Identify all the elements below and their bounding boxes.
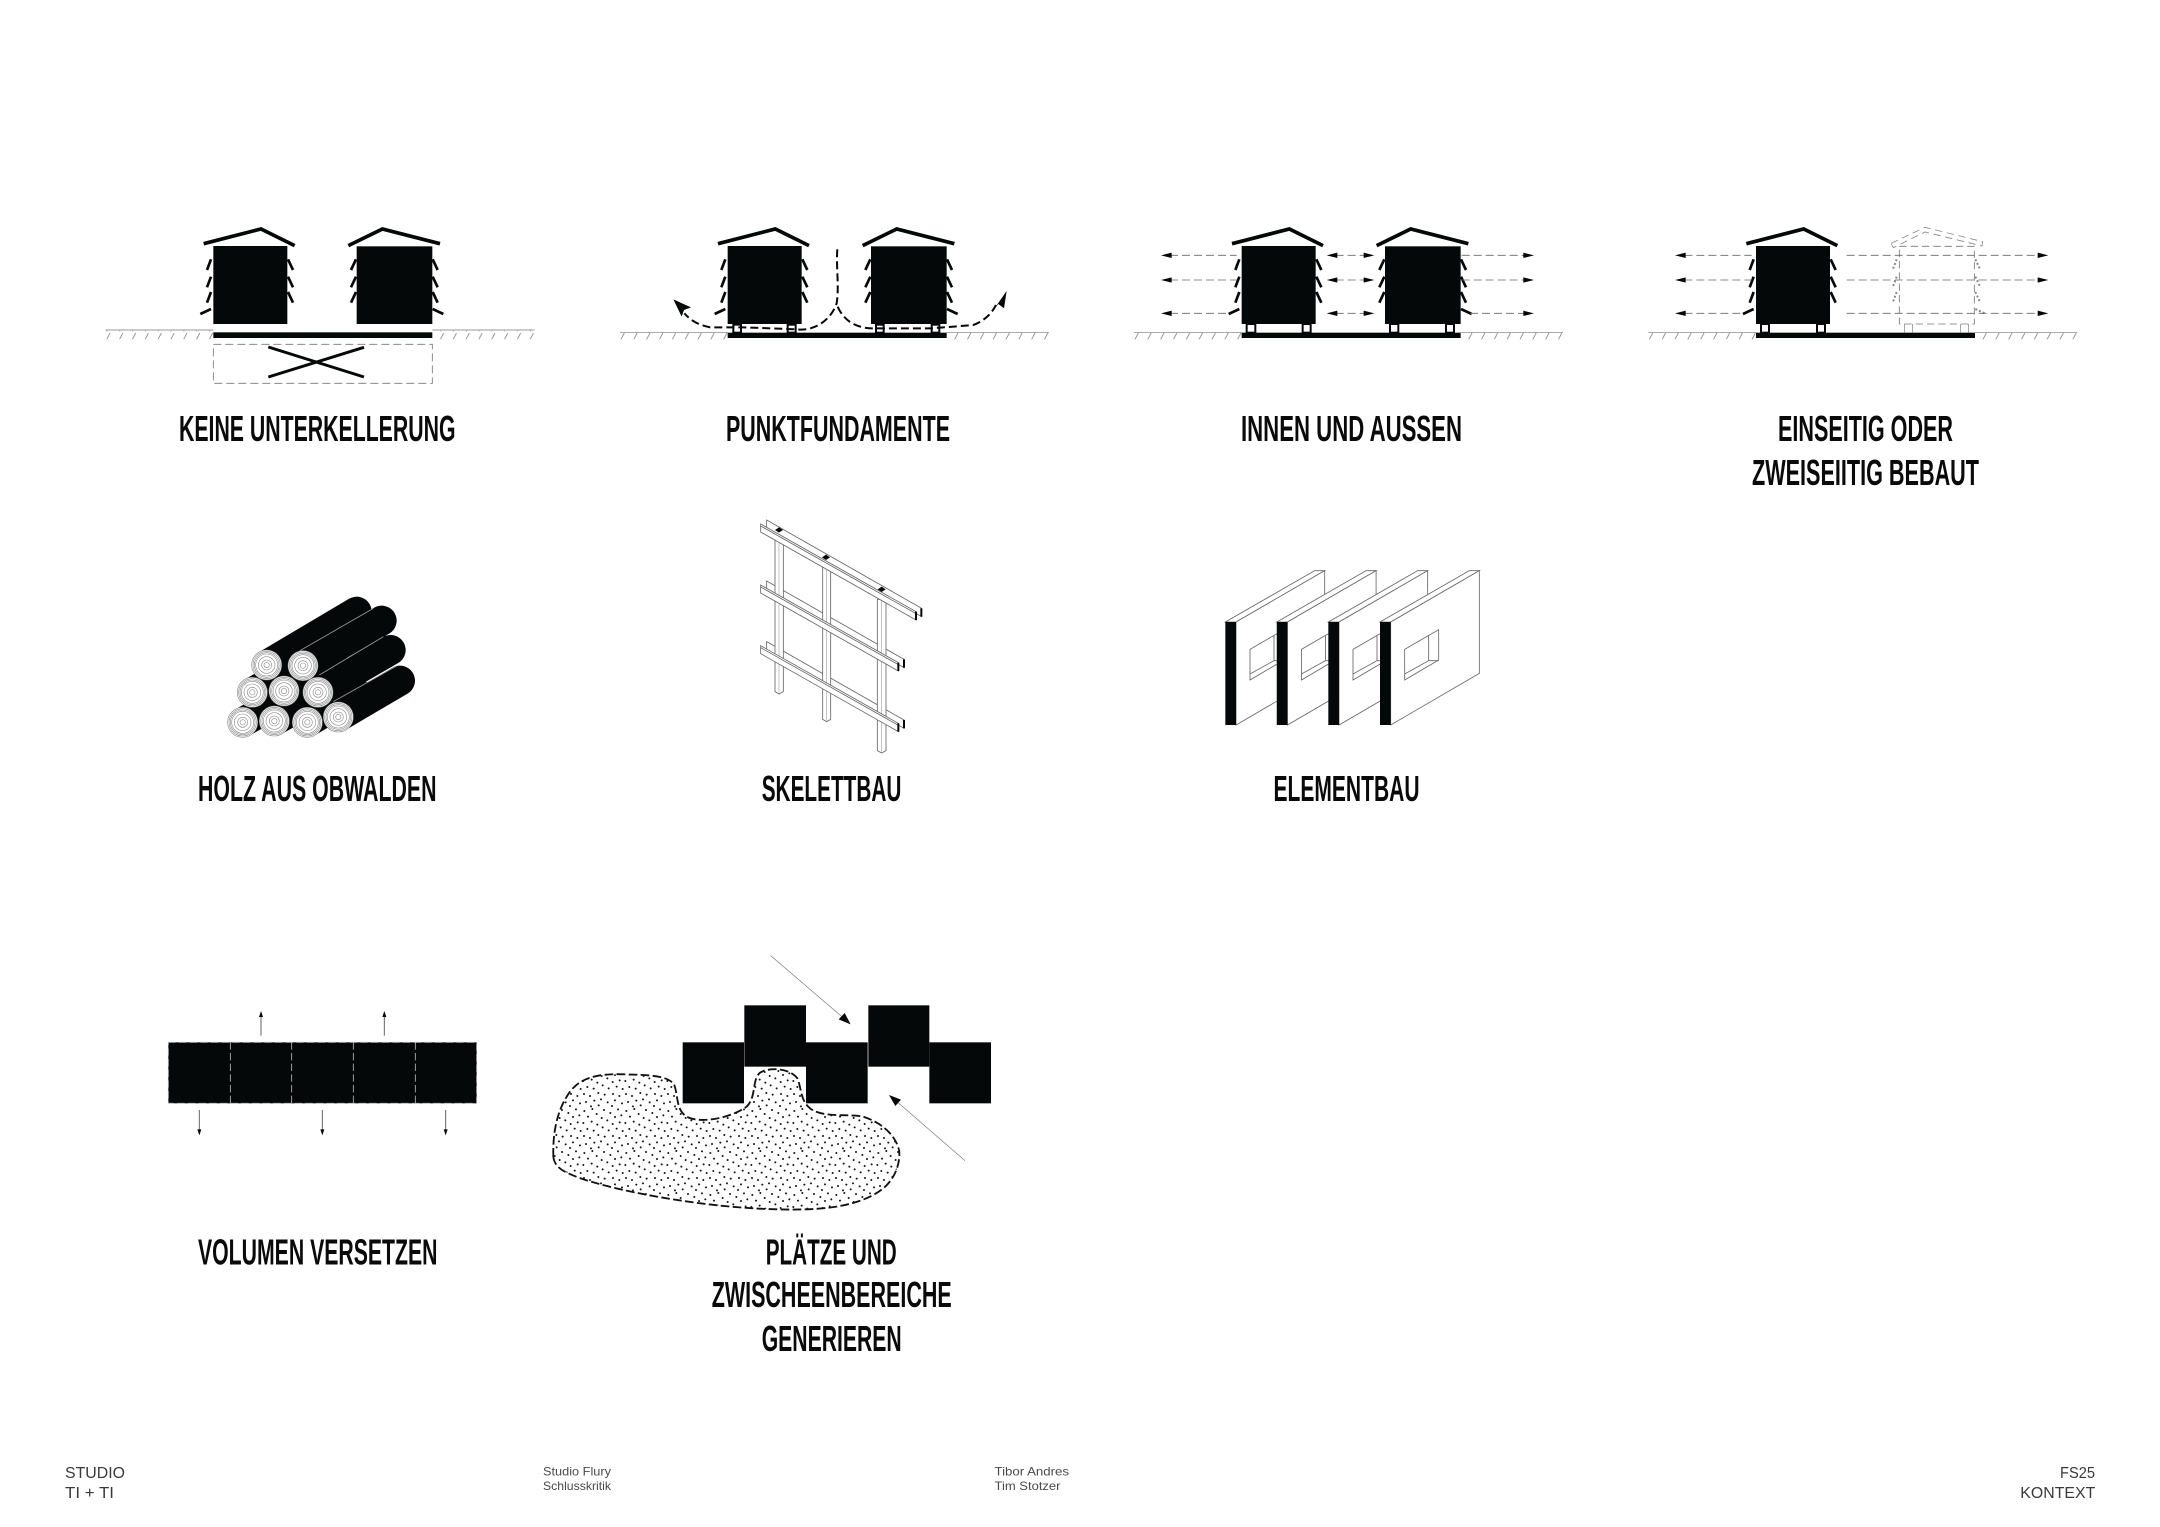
heading: einseitig oder zweiseiitig bebaut: EINSEITIG ODER — [1778, 408, 1953, 449]
heading: plätze und zwischeenbereiche generieren: ZWISCHEENBEREICHE — [712, 1274, 952, 1315]
footer: authors: Tibor Andres — [994, 1464, 1069, 1478]
panel: punktfundamente — [620, 229, 1049, 449]
footer: authors — [994, 1464, 1069, 1493]
footer: course: Studio Flury — [543, 1464, 611, 1478]
panel: holz aus obwalden — [198, 608, 436, 809]
heading: einseitig oder zweiseiitig bebaut: ZWEISEIITIG BEBAUT — [1752, 452, 1979, 493]
panel: keine unterkellerung — [106, 229, 535, 449]
panel: elementbau — [1225, 571, 1479, 809]
footer: authors: Tim Stotzer — [994, 1479, 1060, 1493]
diagram: one built house and one ghost house — [1648, 227, 2077, 340]
footer: course — [543, 1464, 612, 1493]
footer: studio name — [65, 1465, 125, 1502]
panel: volumen versetzen — [168, 1011, 477, 1272]
footer: studio name: STUDIO — [65, 1465, 125, 1482]
diagram: row of five volumes with arrows — [168, 1011, 477, 1135]
panel: skelettbau — [761, 520, 922, 809]
diagram: houses on point foundations with airflow — [620, 229, 1049, 340]
panel: plätze und zwischenbereiche — [553, 956, 991, 1359]
footer: semester and topic: FS25 — [2060, 1465, 2095, 1482]
heading: plätze und zwischeenbereiche generieren — [712, 1232, 952, 1359]
heading: skelettbau: SKELETTBAU — [762, 768, 901, 809]
footer: course: Schlusskritik — [543, 1479, 612, 1493]
footer: studio name: TI + TI — [65, 1485, 114, 1502]
heading: keine unterkellerung: KEINE UNTERKELLERUNG — [179, 408, 456, 449]
heading: plätze und zwischeenbereiche generieren: PLÄTZE UND — [766, 1232, 897, 1272]
footer: semester and topic: KONTEXT — [2020, 1485, 2096, 1502]
diagram: houses with horizontal views — [1134, 229, 1563, 340]
icon: four wall elements — [1225, 571, 1479, 725]
heading: innen und aussen: INNEN UND AUSSEN — [1241, 408, 1462, 449]
icon: stacked logs — [228, 608, 400, 737]
heading: volumen versetzen: VOLUMEN VERSETZEN — [198, 1232, 438, 1272]
panel: einseitig oder zweiseitig bebaut — [1648, 227, 2077, 493]
heading: einseitig oder zweiseiitig bebaut — [1752, 408, 1979, 493]
heading: punktfundamente: PUNKTFUNDAMENTE — [726, 408, 950, 449]
heading: plätze und zwischeenbereiche generieren: GENERIEREN — [762, 1318, 902, 1359]
footer: semester and topic — [2020, 1465, 2096, 1502]
heading: holz aus obwalden: HOLZ AUS OBWALDEN — [198, 768, 436, 809]
panel: innen und aussen — [1134, 229, 1563, 449]
diagram: houses without basement — [106, 229, 535, 383]
heading: elementbau: ELEMENTBAU — [1274, 768, 1420, 809]
icon: timber skeleton frame — [761, 520, 922, 753]
diagram: staggered volumes with stippled square — [553, 956, 991, 1210]
